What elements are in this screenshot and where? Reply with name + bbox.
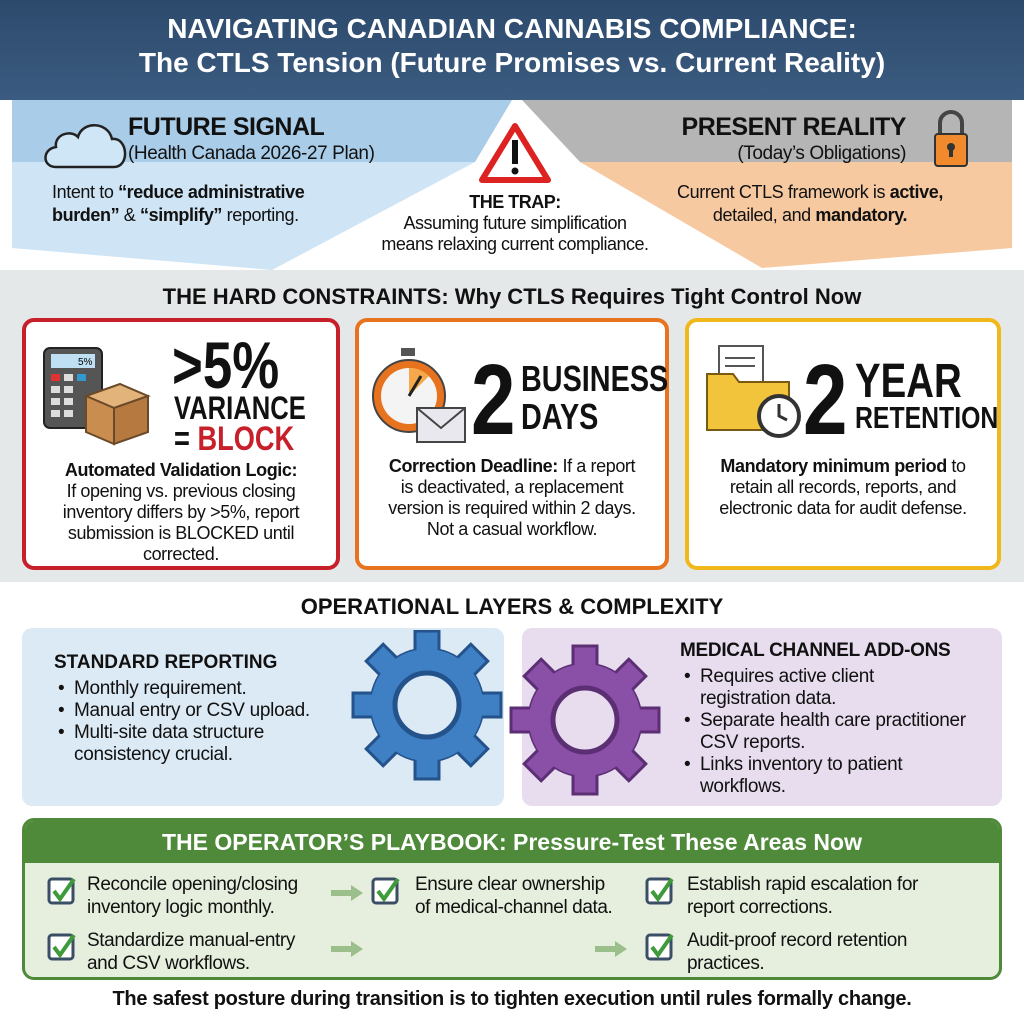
icon: stopwatch and envelope (372, 348, 466, 443)
checklist: Audit-proof record retention (687, 930, 907, 951)
panel: standard reporting: Multi-site data structure (74, 722, 264, 743)
panel: medical channel: MEDICAL CHANNEL ADD-ONS (680, 640, 950, 661)
panel: present reality: (Today’s Obligations) (737, 143, 906, 164)
card: variance: = BLOCK (174, 420, 294, 458)
title (139, 13, 885, 78)
checklist (48, 874, 918, 974)
callout: the trap: THE TRAP: (469, 192, 561, 212)
icon: folder and clock (706, 345, 801, 438)
heading: THE HARD CONSTRAINTS: Why CTLS Requires Tight Control Now (163, 284, 861, 309)
panel: standard reporting: Manual entry or CSV upload. (74, 700, 310, 721)
title: NAVIGATING CANADIAN CANNABIS COMPLIANCE: (167, 13, 857, 44)
checklist: and CSV workflows. (87, 953, 250, 974)
panel: standard reporting: Monthly requirement. (74, 678, 246, 699)
card: business days: BUSINESS (521, 358, 668, 399)
panel: medical channel: workflows. (700, 776, 786, 797)
panel: future signal: (Health Canada 2026-27 Plan) (128, 143, 375, 164)
heading: operational layers: OPERATIONAL LAYERS & COMPLEXITY (301, 594, 723, 619)
title: The CTLS Tension (Future Promises vs. Current Reality) (139, 47, 885, 78)
card: business days: is deactivated, a replacement (401, 477, 623, 497)
panel: medical channel (522, 628, 1002, 806)
panel: medical channel: Links inventory to patient (700, 754, 902, 775)
card: variance: corrected. (143, 544, 219, 564)
panel: future signal (44, 113, 375, 225)
section: hard constraints (0, 270, 1024, 582)
panel: medical channel: CSV reports. (700, 732, 805, 753)
top contrast shapes (12, 100, 1012, 270)
panel: standard reporting: consistency crucial. (74, 744, 233, 765)
panel: medical channel: Separate health care practitioner (700, 710, 966, 731)
icon: cloud (44, 124, 126, 168)
card: retention: RETENTION (855, 400, 998, 435)
panel: medical channel: registration data. (700, 688, 836, 709)
callout: the trap: Assuming future simplification (403, 213, 627, 233)
panel: present reality: PRESENT REALITY (682, 113, 906, 141)
panel: standard reporting: STANDARD REPORTING (54, 652, 277, 673)
checklist: Reconcile opening/closing (87, 874, 298, 895)
panel: medical channel: Requires active client (700, 666, 874, 687)
card: business days: version is required within 2 days. (388, 498, 636, 518)
card: retention: retain all records, reports, and (730, 477, 956, 497)
icon: padlock (934, 110, 968, 167)
checklist: report corrections. (687, 897, 833, 918)
callout: the trap: means relaxing current compliance. (381, 234, 649, 254)
panel: playbook (22, 818, 1002, 980)
icon: gears (352, 630, 660, 796)
icon: calculator and box (43, 347, 151, 446)
panel: standard reporting (22, 628, 504, 806)
card: business days (355, 318, 669, 570)
card: variance: Automated Validation Logic: (65, 460, 297, 480)
card: variance: submission is BLOCKED until (68, 523, 294, 543)
card: variance: inventory differs by >5%, report (63, 502, 299, 522)
card: variance: If opening vs. previous closing (67, 481, 295, 501)
card: business days: Correction Deadline: If a report (389, 456, 635, 476)
checklist: inventory logic monthly. (87, 897, 275, 918)
checklist: Standardize manual-entry (87, 930, 295, 951)
heading (25, 821, 999, 863)
panel: future signal: Intent to “reduce administrative (52, 182, 304, 202)
card: retention: electronic data for audit defense. (719, 498, 967, 518)
icon: warning (479, 123, 551, 183)
panel: future signal: FUTURE SIGNAL (128, 113, 324, 141)
card: retention: YEAR (855, 355, 962, 408)
panel: future signal: burden” & “simplify” reporting. (52, 205, 299, 225)
card: retention: 2 (803, 344, 848, 456)
card: variance: VARIANCE (174, 390, 306, 426)
checklist: Establish rapid escalation for (687, 874, 918, 895)
card: business days: 2 (471, 344, 516, 456)
panel: present reality: Current CTLS framework is active, (677, 182, 943, 202)
panel: present reality: detailed, and mandatory. (713, 205, 907, 225)
checklist: Ensure clear ownership (415, 874, 605, 895)
card: business days: DAYS (521, 396, 598, 437)
footer statement: The safest posture during transition is to tighten execution until rules formally change. (113, 988, 911, 1010)
checklist: practices. (687, 953, 764, 974)
card: variance (22, 318, 340, 570)
card: retention: Mandatory minimum period to (720, 456, 966, 476)
card: retention (685, 318, 1001, 570)
checklist: of medical-channel data. (415, 897, 612, 918)
card: variance: >5% (172, 328, 279, 402)
header banner (0, 0, 1024, 100)
callout: the trap (381, 123, 649, 254)
card: business days: Not a casual workflow. (427, 519, 597, 539)
icon: calculator and box: 5% (78, 357, 93, 368)
panel: present reality (677, 110, 968, 225)
heading: THE OPERATOR’S PLAYBOOK: Pressure-Test These Areas Now (162, 829, 862, 855)
